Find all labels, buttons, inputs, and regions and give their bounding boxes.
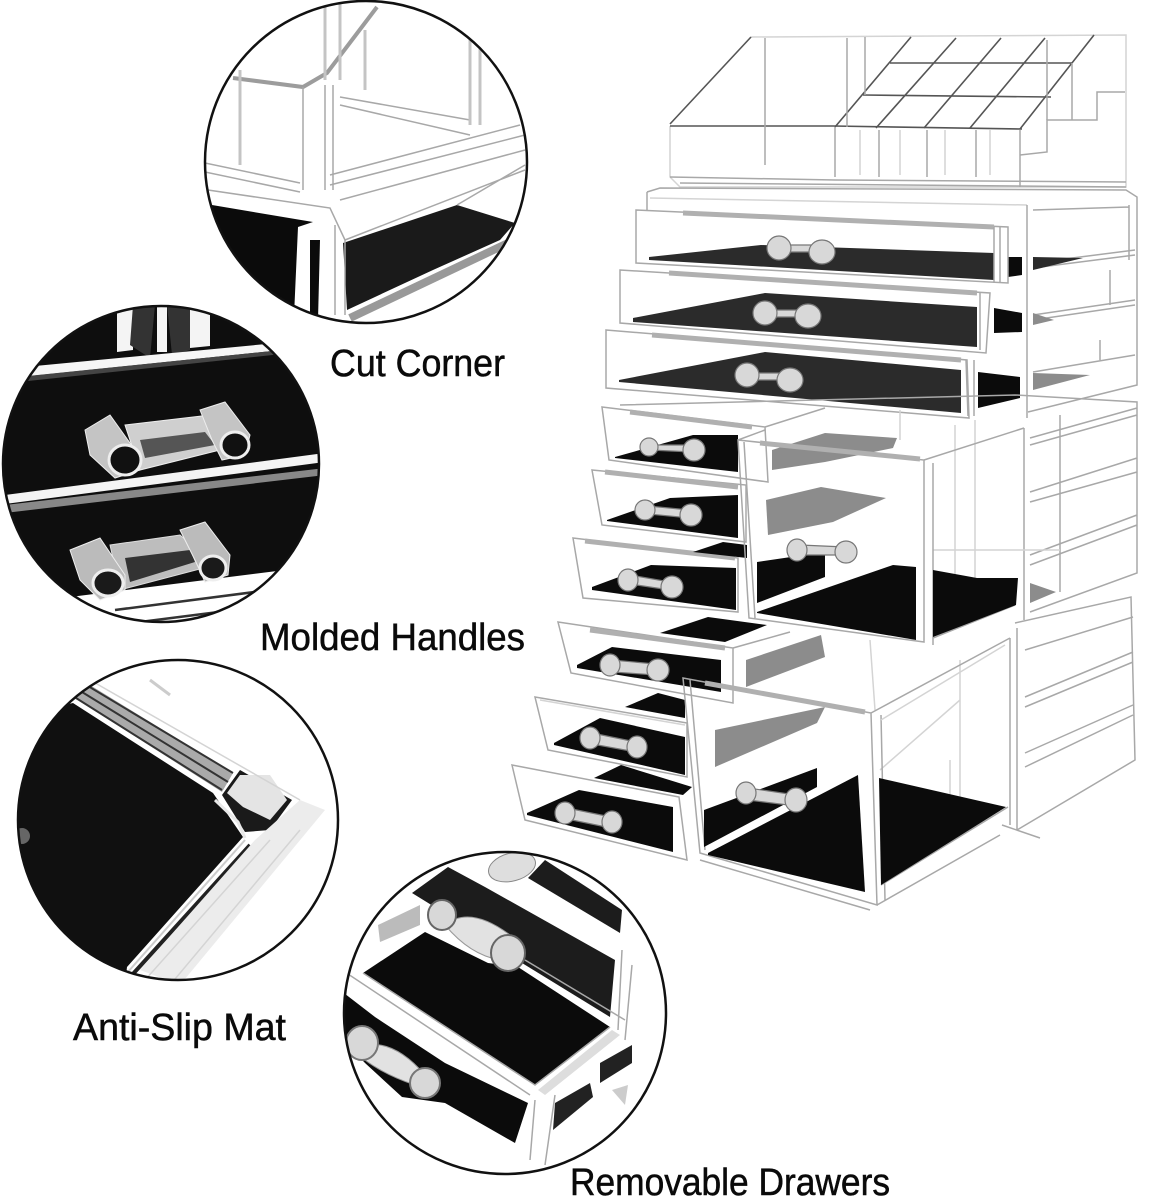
handle (635, 500, 702, 526)
drawer 3 (606, 330, 974, 418)
acrylic edges (345, 905, 632, 1165)
case: lower section (715, 597, 1135, 838)
label: Cut Corner: Cut Corner (330, 343, 505, 385)
large middle drawer (738, 428, 1056, 645)
small drawer row 1 (602, 407, 825, 482)
small drawer row 4 (558, 617, 790, 703)
handle (600, 654, 669, 681)
corner foot (215, 770, 292, 838)
lipstick tray top (670, 35, 1126, 187)
small drawer row 6 (512, 765, 692, 860)
black mat panel (19, 703, 243, 970)
small drawer row 3 (573, 538, 747, 612)
drawer 2 (620, 270, 990, 353)
handle (787, 539, 857, 563)
handle (580, 727, 647, 758)
small drawer row 2 (592, 470, 746, 542)
black panels (340, 860, 632, 1143)
product: acrylic makeup organizer tower (512, 35, 1137, 910)
clear edge shading (14, 680, 325, 985)
upper handle (85, 402, 250, 478)
handle (753, 301, 821, 328)
small drawer row 5 (535, 693, 687, 777)
detail circle: removable drawers (340, 847, 666, 1174)
drawer 1 (636, 210, 1008, 283)
handle (555, 802, 622, 833)
handle (640, 438, 705, 461)
acrylic edges (205, 0, 525, 318)
case: upper section (647, 188, 1137, 418)
ribbed acrylic edge (75, 685, 250, 975)
upper handle (428, 900, 525, 971)
handle (735, 363, 803, 392)
large lower drawer (683, 638, 1010, 910)
black mats (205, 205, 515, 320)
handle (767, 236, 835, 264)
detail circle: cut corner (205, 0, 527, 323)
lower handle (346, 1026, 440, 1098)
handle (736, 782, 807, 812)
handle (618, 569, 683, 598)
white bands and uprights (7, 307, 318, 621)
case: middle section (620, 395, 1137, 620)
top handle (488, 853, 536, 882)
detail circle: anti-slip mat (0, 660, 338, 985)
label: Molded Handles: Molded Handles (260, 617, 525, 659)
lower handle (70, 522, 230, 600)
detail circle: molded handles (3, 305, 330, 640)
label: Anti-Slip Mat: Anti-Slip Mat (73, 1007, 286, 1049)
